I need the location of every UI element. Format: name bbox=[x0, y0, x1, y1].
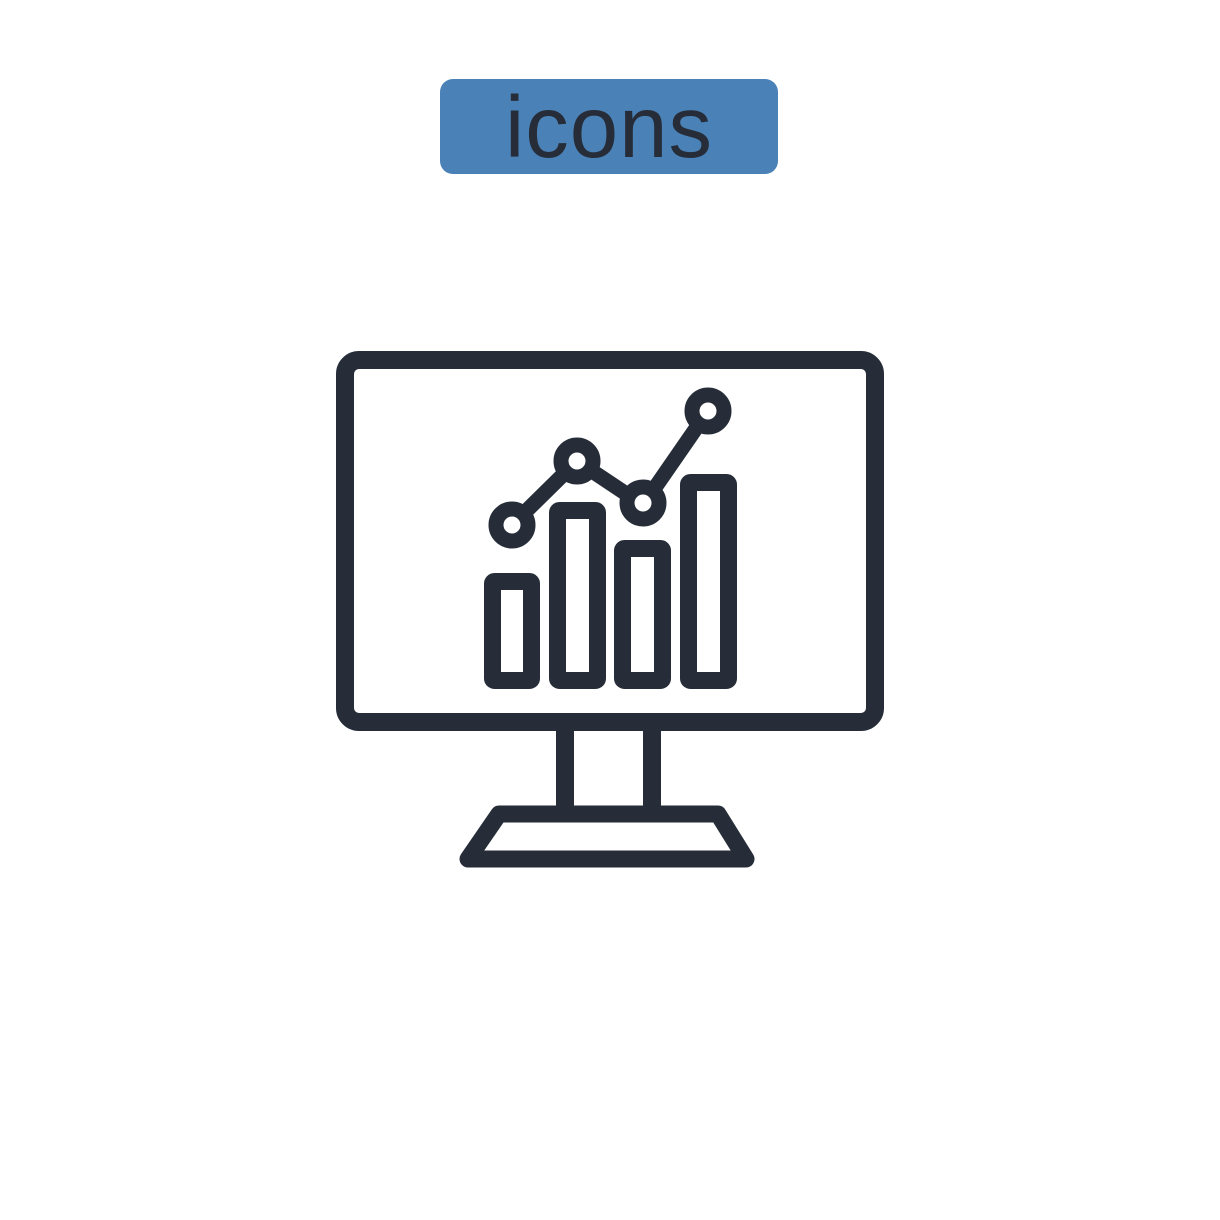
title badge: icons bbox=[505, 79, 713, 176]
stand neck bbox=[565, 731, 652, 808]
title badge bbox=[440, 79, 778, 174]
stand base bbox=[468, 814, 746, 859]
line graph bbox=[496, 395, 724, 541]
monitor screen bbox=[345, 360, 875, 722]
bar chart bbox=[492, 482, 728, 680]
